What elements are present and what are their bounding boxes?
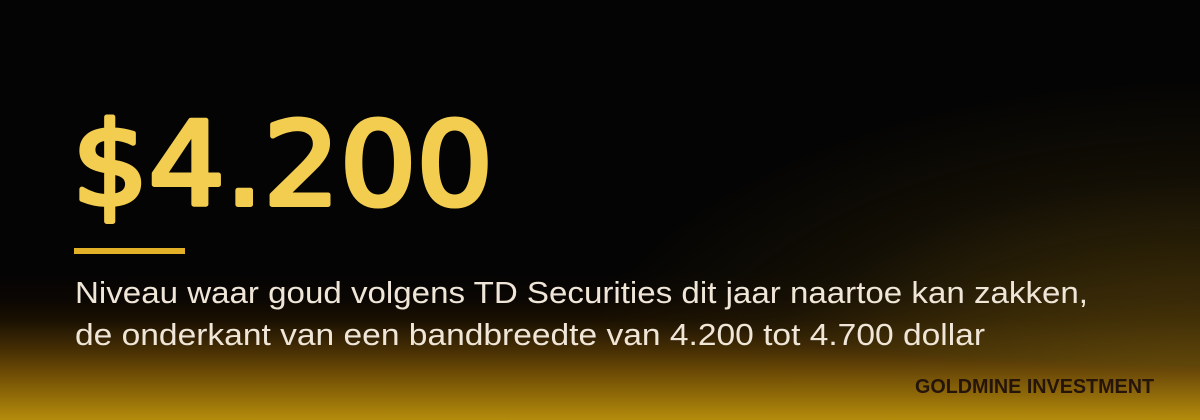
headline figure: $4.200 [72,98,493,232]
description text: Niveau waar goud volgens TD Securities dit jaar naartoe kan zakken, [75,275,1088,310]
source credit: GOLDMINE INVESTMENT [915,376,1154,398]
description text [75,275,1088,352]
description text: de onderkant van een bandbreedte van 4.200 tot 4.700 dollar [75,317,985,352]
accent rule [74,248,185,254]
